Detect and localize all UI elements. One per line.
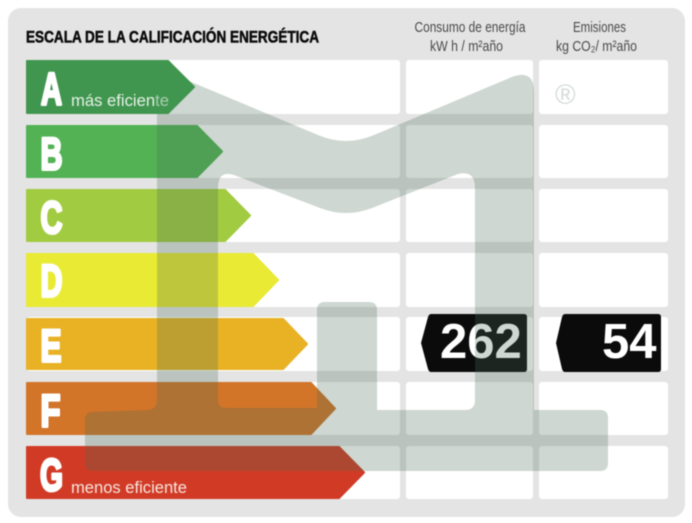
column heading: energy consumption [414, 19, 526, 55]
rating arrow A [27, 61, 194, 114]
column heading: emissions: kg CO₂/ m²año [556, 38, 637, 55]
rating arrow D: D [40, 256, 62, 306]
column heading: energy consumption: kW h / m²año [430, 38, 503, 55]
emissions value badge: 54 [602, 315, 657, 369]
rating arrow C: C [40, 192, 62, 243]
rating arrow E: E [40, 320, 62, 372]
rating arrow B: B [40, 128, 62, 180]
rating arrow G: G [40, 450, 63, 500]
registered mark: ® [555, 79, 576, 110]
watermark: M logo [85, 71, 608, 471]
column heading: emissions [556, 19, 637, 55]
rating arrow F: F [40, 386, 60, 436]
table grid cells [26, 60, 668, 499]
title: ESCALA DE LA CALIFICACIÓN ENERGÉTICA [26, 28, 319, 46]
column heading: energy consumption: Consumo de energía [414, 19, 526, 36]
energy consumption value badge: 262 [440, 315, 522, 369]
rating arrow F [27, 383, 335, 436]
rating arrow A: A [41, 64, 62, 114]
rating arrow A: más eficiente [71, 91, 169, 110]
rating arrow G: menos eficiente [71, 478, 187, 497]
column heading: emissions: Emisiones [573, 19, 626, 36]
rating arrow C [27, 190, 250, 243]
rating arrow G [27, 447, 364, 500]
emissions value badge [556, 314, 661, 372]
rating arrow D [27, 254, 278, 306]
rating arrow E [27, 319, 307, 372]
rating arrow B [27, 126, 222, 180]
